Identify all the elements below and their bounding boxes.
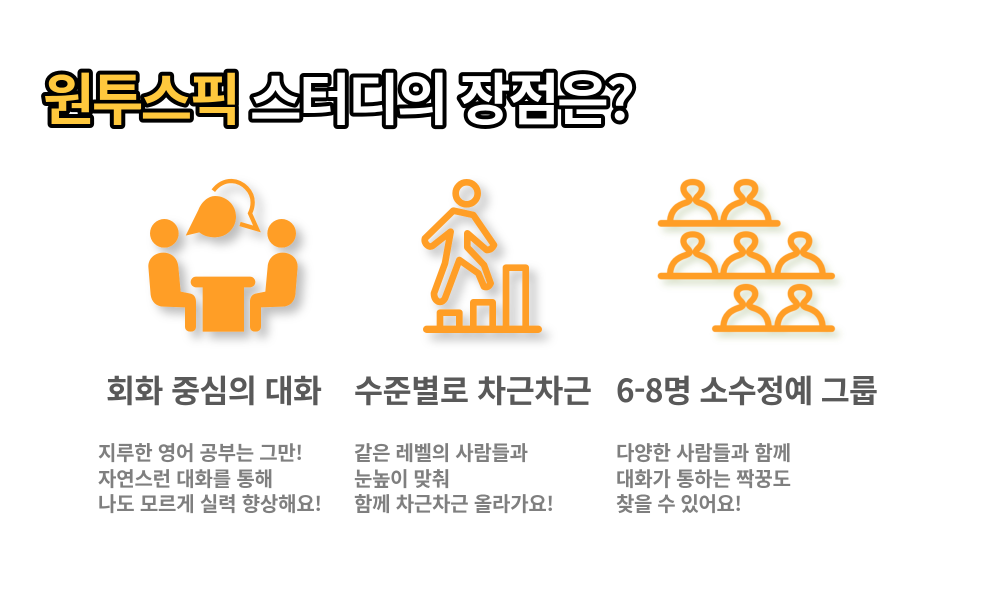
text block: small groups: 다양한 사람들과 함께 [616, 437, 791, 466]
text block: small groups [616, 437, 791, 517]
title: 스터디의 장점은? [250, 56, 635, 137]
heading: conversation: 회화 중심의 대화 [106, 366, 322, 412]
heading: step by step: 수준별로 차근차근 [354, 366, 592, 412]
icon: person climbing stairs [425, 182, 538, 329]
icon: people talking at a table [148, 181, 298, 332]
title [43, 56, 635, 137]
text block: conversation: 자연스런 대화를 통해 [98, 463, 273, 492]
text block: conversation [98, 437, 322, 517]
text block: step by step [354, 437, 554, 517]
text block: step by step: 같은 레벨의 사람들과 [354, 437, 528, 466]
text block: step by step: 함께 차근차근 올라가요! [354, 488, 554, 517]
text block: small groups: 대화가 통하는 짝꿍도 [616, 463, 791, 492]
heading: small groups: 6-8명 소수정예 그룹 [616, 366, 878, 412]
text block: step by step: 눈높이 맞춰 [354, 463, 450, 492]
text block: conversation: 지루한 영어 공부는 그만! [98, 437, 303, 466]
panel: step by step by level [354, 182, 592, 517]
icon: rows of people [661, 182, 832, 329]
panel: small groups [616, 182, 878, 517]
title: 원투스픽 [43, 56, 241, 137]
text block: conversation: 나도 모르게 실력 향상해요! [98, 488, 322, 517]
text block: small groups: 찾을 수 있어요! [616, 488, 742, 517]
panel: conversation-centred [98, 181, 322, 517]
